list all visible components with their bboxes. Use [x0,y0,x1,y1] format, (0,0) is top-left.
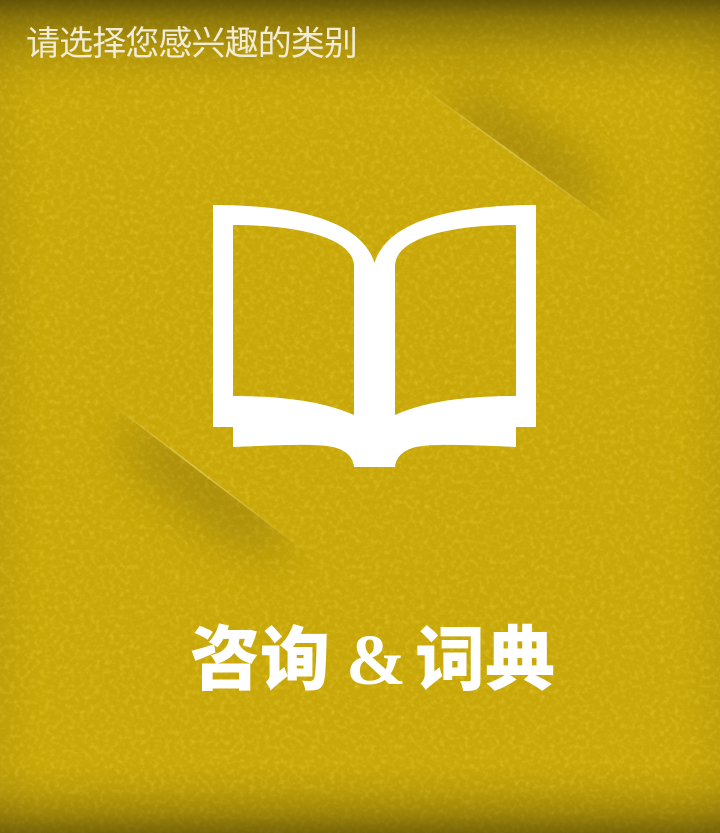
title: consulting and dictionary: & [346,620,406,700]
title: consulting and dictionary: 咨询 [190,621,330,699]
title: consulting and dictionary [190,620,555,700]
heading: category prompt: 请选择您感兴趣的类别 [26,25,357,63]
icon: open book [213,205,536,467]
title: consulting and dictionary: 词典 [415,621,555,699]
